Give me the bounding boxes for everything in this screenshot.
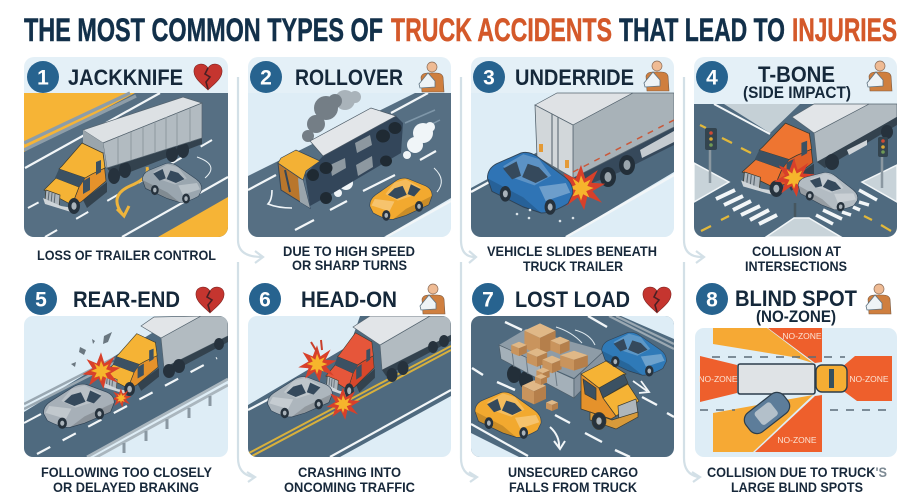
number badge 7	[472, 283, 504, 315]
icon: injured person	[644, 61, 669, 91]
diagram: truck no-zones	[695, 328, 897, 457]
number badge 6	[249, 283, 281, 315]
scene: head-on collision	[248, 316, 451, 457]
heading: t-bone: T-BONE	[758, 62, 835, 87]
panel 8: blind spot	[695, 283, 897, 495]
number badge 8	[696, 283, 728, 315]
number badge 2	[250, 61, 282, 93]
scene: intersection collision	[694, 104, 897, 237]
heading: rollover: ROLLOVER	[295, 65, 403, 90]
title: TRUCK ACCIDENTS	[391, 12, 612, 48]
number badge 4: 4	[706, 66, 718, 90]
caption: head-on: ONCOMING TRAFFIC	[284, 479, 415, 495]
caption: blind spot: LARGE BLIND SPOTS	[731, 479, 863, 495]
heading: blind spot: BLIND SPOT	[735, 286, 858, 311]
caption: t-bone: COLLISION AT	[752, 243, 841, 259]
caption: head-on	[284, 464, 415, 495]
caption: lost load: UNSECURED CARGO	[508, 464, 638, 480]
caption: rollover: DUE TO HIGH SPEED	[283, 243, 415, 259]
number badge 1: 1	[37, 66, 49, 90]
heading: underride: UNDERRIDE	[515, 65, 634, 90]
truck cab	[581, 361, 639, 430]
number badge 4	[696, 61, 728, 93]
number badge 3: 3	[483, 66, 495, 90]
scene: car under trailer	[471, 93, 674, 237]
caption: blind spot	[707, 464, 887, 495]
heading: rear-end: REAR-END	[73, 287, 180, 312]
icon: injured person	[420, 284, 445, 314]
title: THE MOST COMMON TYPES OF	[24, 12, 383, 48]
heading: jackknife: JACKKNIFE	[68, 65, 183, 90]
icon: injured person	[419, 62, 444, 92]
number badge 7: 7	[482, 288, 494, 312]
caption: blind spot: COLLISION DUE TO TRUCK'S	[707, 464, 887, 480]
panel 6: head-on	[248, 283, 451, 495]
number badge 8: 8	[706, 288, 718, 312]
panel 5: rear-end	[24, 283, 228, 495]
panel 4: t-bone	[694, 57, 897, 274]
panel 2: rollover	[248, 57, 451, 273]
diagram: truck no-zones: NO-ZONE	[777, 435, 817, 445]
heading: blind spot: (NO-ZONE)	[756, 307, 836, 326]
heading: lost load: LOST LOAD	[515, 287, 630, 312]
caption: rear-end: OR DELAYED BRAKING	[53, 479, 199, 495]
caption: head-on: CRASHING INTO	[298, 464, 401, 480]
caption: t-bone	[745, 243, 847, 274]
panel 1: jackknife	[24, 57, 228, 263]
caption: rollover	[283, 243, 415, 273]
heading: t-bone	[743, 62, 851, 102]
number badge 1	[27, 61, 59, 93]
caption: lost load: FALLS FROM TRUCK	[509, 479, 637, 495]
diagram: truck no-zones: NO-ZONE	[698, 374, 738, 384]
icon: broken heart	[194, 64, 222, 90]
diagram: truck no-zones: NO-ZONE	[782, 331, 822, 341]
scene: truck losing cargo	[471, 316, 674, 458]
number badge 3	[473, 61, 505, 93]
caption: rollover: OR SHARP TURNS	[292, 257, 407, 273]
panel 3: underride	[471, 57, 674, 274]
icon: injured person	[866, 284, 891, 314]
caption: underride	[487, 243, 657, 274]
icon: injured person	[867, 61, 892, 91]
caption: underride: VEHICLE SLIDES BENEATH	[487, 243, 657, 259]
icon: broken heart	[643, 287, 671, 313]
caption: lost load	[508, 464, 638, 495]
panel 7: lost load	[471, 283, 674, 495]
heading: t-bone: (SIDE IMPACT)	[743, 83, 851, 102]
heading: blind spot	[735, 286, 858, 326]
caption: t-bone: INTERSECTIONS	[745, 258, 847, 274]
icon: broken heart	[196, 287, 224, 313]
caption: underride: TRUCK TRAILER	[523, 258, 623, 274]
number badge 5: 5	[35, 288, 47, 312]
diagram: truck no-zones: NO-ZONE	[849, 374, 889, 384]
caption: rear-end: FOLLOWING TOO CLOSELY	[41, 464, 213, 480]
scene: car hit from behind by truck	[24, 316, 228, 459]
scene: overturned truck	[248, 90, 451, 237]
number badge 2: 2	[260, 66, 272, 90]
title	[24, 12, 897, 48]
title: THAT LEAD TO	[619, 12, 785, 48]
connector arrows between columns	[238, 77, 704, 482]
caption: jackknife: LOSS OF TRAILER CONTROL	[37, 247, 216, 263]
caption: rear-end	[41, 464, 213, 495]
number badge 6: 6	[259, 288, 271, 312]
number badge 5	[25, 283, 57, 315]
scene: jackknifed truck and car	[24, 93, 228, 237]
heading: head-on: HEAD-ON	[301, 287, 397, 312]
